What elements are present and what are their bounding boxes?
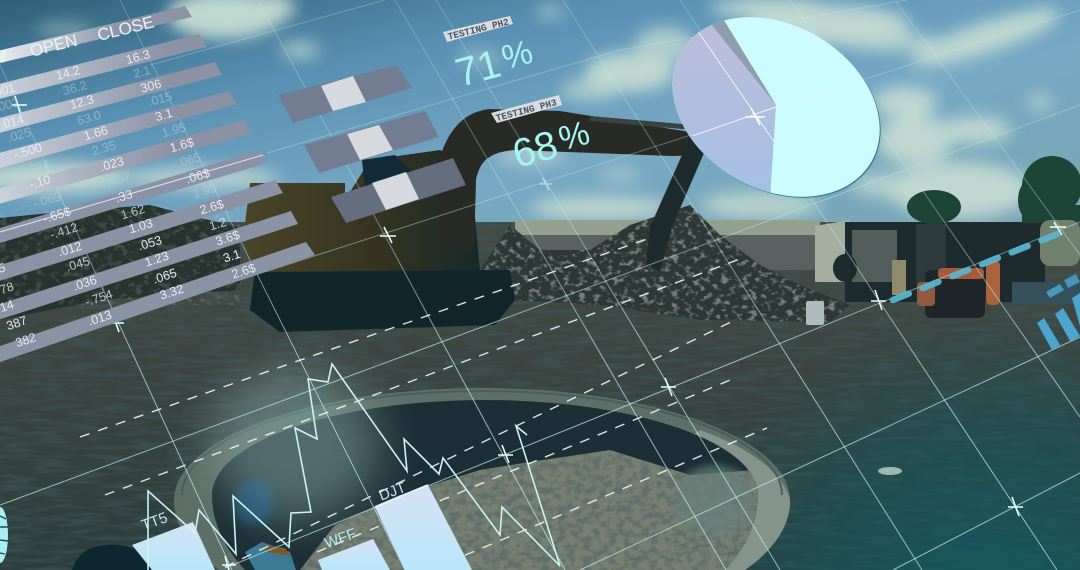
table values: 1.03: [127, 216, 155, 236]
table values: 3.32: [158, 282, 186, 303]
value 68%: %: [555, 114, 594, 158]
trees: [907, 156, 1080, 224]
table rows: [0, 6, 315, 362]
bar WFF: [318, 539, 390, 570]
bottom left gauge: [0, 507, 8, 563]
progress widget 3: [331, 158, 466, 223]
excavator: [243, 109, 704, 332]
table values: 3.1: [154, 106, 174, 124]
table values: 16.3: [124, 47, 152, 67]
testing PH3 readout: [491, 95, 595, 177]
circular bin with rubble: [174, 388, 790, 570]
table values: 2.1: [132, 63, 152, 81]
table values: 12.3: [68, 92, 96, 112]
table header: OPEN: [28, 31, 79, 61]
table values: -.324: [20, 157, 52, 179]
table values: 1.23: [143, 249, 171, 270]
table values: 1.95: [160, 120, 188, 140]
table header: CLOSE: [95, 12, 156, 45]
label DJT: DJT: [377, 479, 408, 504]
progress widget 1: [278, 65, 412, 123]
forklift, gas tank and tanker: [916, 220, 1080, 318]
lens flare: [234, 481, 274, 525]
dark object at bottom left: [72, 545, 152, 570]
tag: testing PH3: TESTING PH3: [495, 97, 558, 124]
label WFF: WFF: [322, 525, 359, 552]
table values: .057: [105, 169, 133, 189]
table values: 382: [14, 330, 38, 350]
dashed trend lines: [80, 238, 767, 570]
table values: 1.62: [119, 202, 147, 222]
table values: .065: [175, 150, 203, 170]
table values: .045: [64, 254, 92, 274]
table values: -.065: [31, 189, 63, 211]
table values: .33: [113, 187, 134, 205]
bar chart: [132, 479, 472, 570]
pie chart: [672, 17, 881, 198]
data table: [0, 6, 315, 362]
table values: [0, 47, 258, 350]
zigzag line chart: [148, 364, 560, 570]
scrap pile: [480, 205, 857, 325]
cyan dashed line: [893, 233, 1060, 300]
table values: 1.95: [191, 181, 219, 201]
pebble on ground: [878, 467, 902, 475]
table values: 63.0: [75, 108, 103, 128]
table values: .06$: [184, 166, 212, 186]
table values: -.500: [12, 140, 44, 162]
ground: [0, 222, 1080, 570]
table values: 3.6$: [214, 228, 242, 249]
table values: 2.6$: [198, 197, 226, 217]
background scrap on the left: [0, 205, 240, 320]
table values: -.65$: [41, 204, 73, 226]
bar DJT: [375, 485, 472, 570]
table values: -.10: [28, 172, 52, 192]
colourful debris: [245, 542, 296, 570]
table values: 3.1: [221, 247, 242, 266]
table values: 1.6$: [168, 135, 196, 155]
value 71%: %: [498, 33, 537, 77]
table values: -.412: [48, 220, 80, 242]
table values: 1.66: [82, 123, 110, 143]
table values: .013: [86, 308, 114, 329]
smoke haze: [210, 370, 380, 520]
table values: 2.6$: [230, 261, 258, 282]
table values: .036: [71, 273, 99, 294]
sky with clouds: [0, 0, 1080, 240]
testing PH2 readout: [443, 16, 538, 96]
table header: [0, 12, 156, 69]
table values: 2.35: [90, 138, 118, 158]
far building and shed: [515, 220, 1045, 302]
table values: 1.2: [207, 215, 228, 233]
value 68%: 68: [508, 123, 562, 177]
small bar chart icon at right edge: [1037, 274, 1080, 350]
table values: 14.2: [54, 63, 82, 83]
value 71%: 71: [451, 42, 505, 96]
table values: 36.2: [61, 78, 89, 98]
table values: .065: [151, 266, 179, 287]
table values: -.754: [83, 287, 115, 309]
table values: .023: [98, 154, 126, 174]
bar TT5: [132, 522, 215, 570]
label TT5: TT5: [139, 509, 170, 534]
tag: testing PH2: TESTING PH2: [447, 17, 510, 42]
progress widget 2: [304, 111, 439, 173]
table values: 306: [139, 77, 163, 96]
table values: .025: [5, 125, 33, 145]
table values: .015: [146, 89, 174, 109]
table values: .012: [56, 239, 84, 259]
table values: 387: [5, 313, 29, 333]
table values: .053: [136, 233, 164, 253]
